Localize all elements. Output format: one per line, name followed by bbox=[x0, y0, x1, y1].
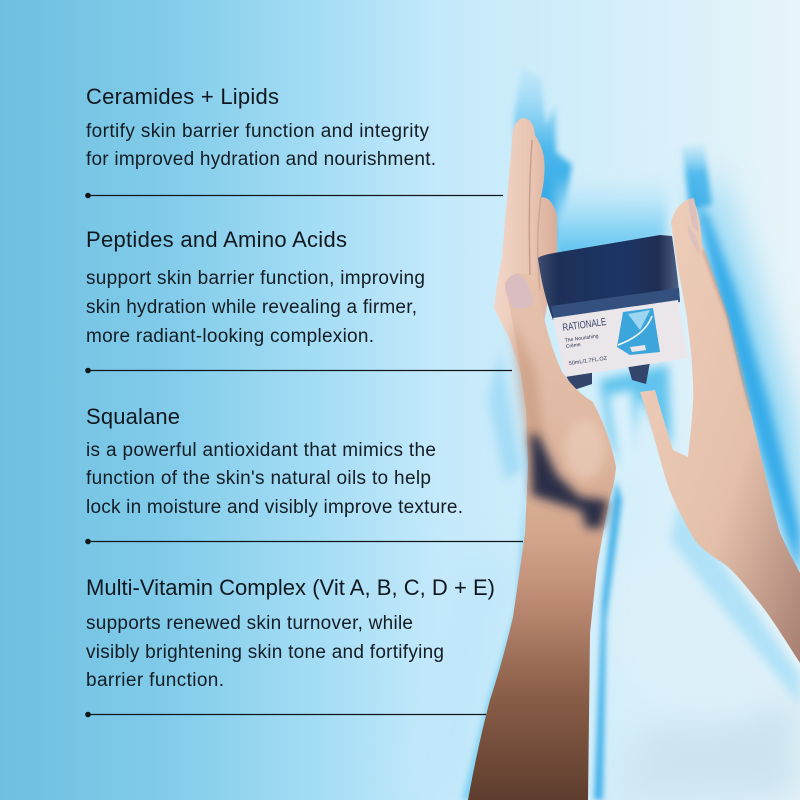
ingredient block: Squalane bbox=[85, 404, 523, 544]
divider with dot bbox=[85, 712, 486, 717]
description: fortify skin barrier function and integrity bbox=[86, 121, 430, 142]
description: barrier function. bbox=[86, 670, 224, 691]
description: visibly brightening skin tone and fortifying bbox=[86, 642, 444, 663]
divider with dot bbox=[85, 368, 512, 373]
description: for improved hydration and nourishment. bbox=[86, 149, 436, 170]
description: skin hydration while revealing a firmer, bbox=[86, 297, 417, 318]
jar base bbox=[566, 362, 650, 390]
ingredient block: Peptides and Amino Acids bbox=[85, 227, 512, 373]
description: support skin barrier function, improving bbox=[86, 268, 425, 289]
description: function of the skin's natural oils to help bbox=[86, 468, 431, 489]
description bbox=[86, 268, 425, 347]
jar label bbox=[553, 300, 688, 377]
heading: Peptides and Amino Acids bbox=[86, 227, 347, 252]
jar lid bbox=[538, 235, 680, 320]
heading: Ceramides + Lipids bbox=[86, 84, 279, 109]
cream jar bbox=[538, 235, 688, 390]
thumb nail bbox=[505, 274, 534, 309]
ingredient block: Ceramides + Lipids bbox=[85, 84, 503, 198]
description bbox=[86, 440, 463, 518]
description: lock in moisture and visibly improve texture. bbox=[86, 497, 463, 518]
thumb shading bbox=[512, 320, 545, 450]
blue shadow glow behind hands bbox=[462, 68, 800, 800]
brand name RATIONALE: RATIONALE bbox=[562, 316, 607, 334]
heading: Multi-Vitamin Complex (Vit A, B, C, D + E) bbox=[86, 575, 495, 600]
divider with dot bbox=[85, 539, 523, 544]
product descriptor: Crème bbox=[565, 342, 581, 350]
right hand bbox=[640, 198, 800, 663]
description bbox=[86, 613, 444, 691]
description: supports renewed skin turnover, while bbox=[86, 613, 413, 634]
description bbox=[86, 121, 436, 170]
palm highlight bbox=[565, 420, 605, 480]
description: is a powerful antioxidant that mimics the bbox=[86, 440, 436, 461]
right hand nails bbox=[688, 198, 700, 255]
product size: 50mL/1.7FL.OZ bbox=[568, 356, 608, 367]
divider with dot bbox=[85, 193, 503, 198]
product name: The Nourishing bbox=[564, 333, 599, 344]
description: more radiant-looking complexion. bbox=[86, 326, 374, 347]
ingredient block: Multi-Vitamin Complex bbox=[85, 575, 495, 717]
heading: Squalane bbox=[86, 404, 180, 429]
back finger shading bbox=[703, 250, 750, 410]
label artwork bbox=[617, 308, 660, 355]
dark wrist shadow bbox=[530, 432, 608, 528]
jar neck band bbox=[551, 288, 680, 322]
left hand back fingers bbox=[494, 118, 557, 400]
left forearm and front thumb bbox=[468, 273, 616, 800]
